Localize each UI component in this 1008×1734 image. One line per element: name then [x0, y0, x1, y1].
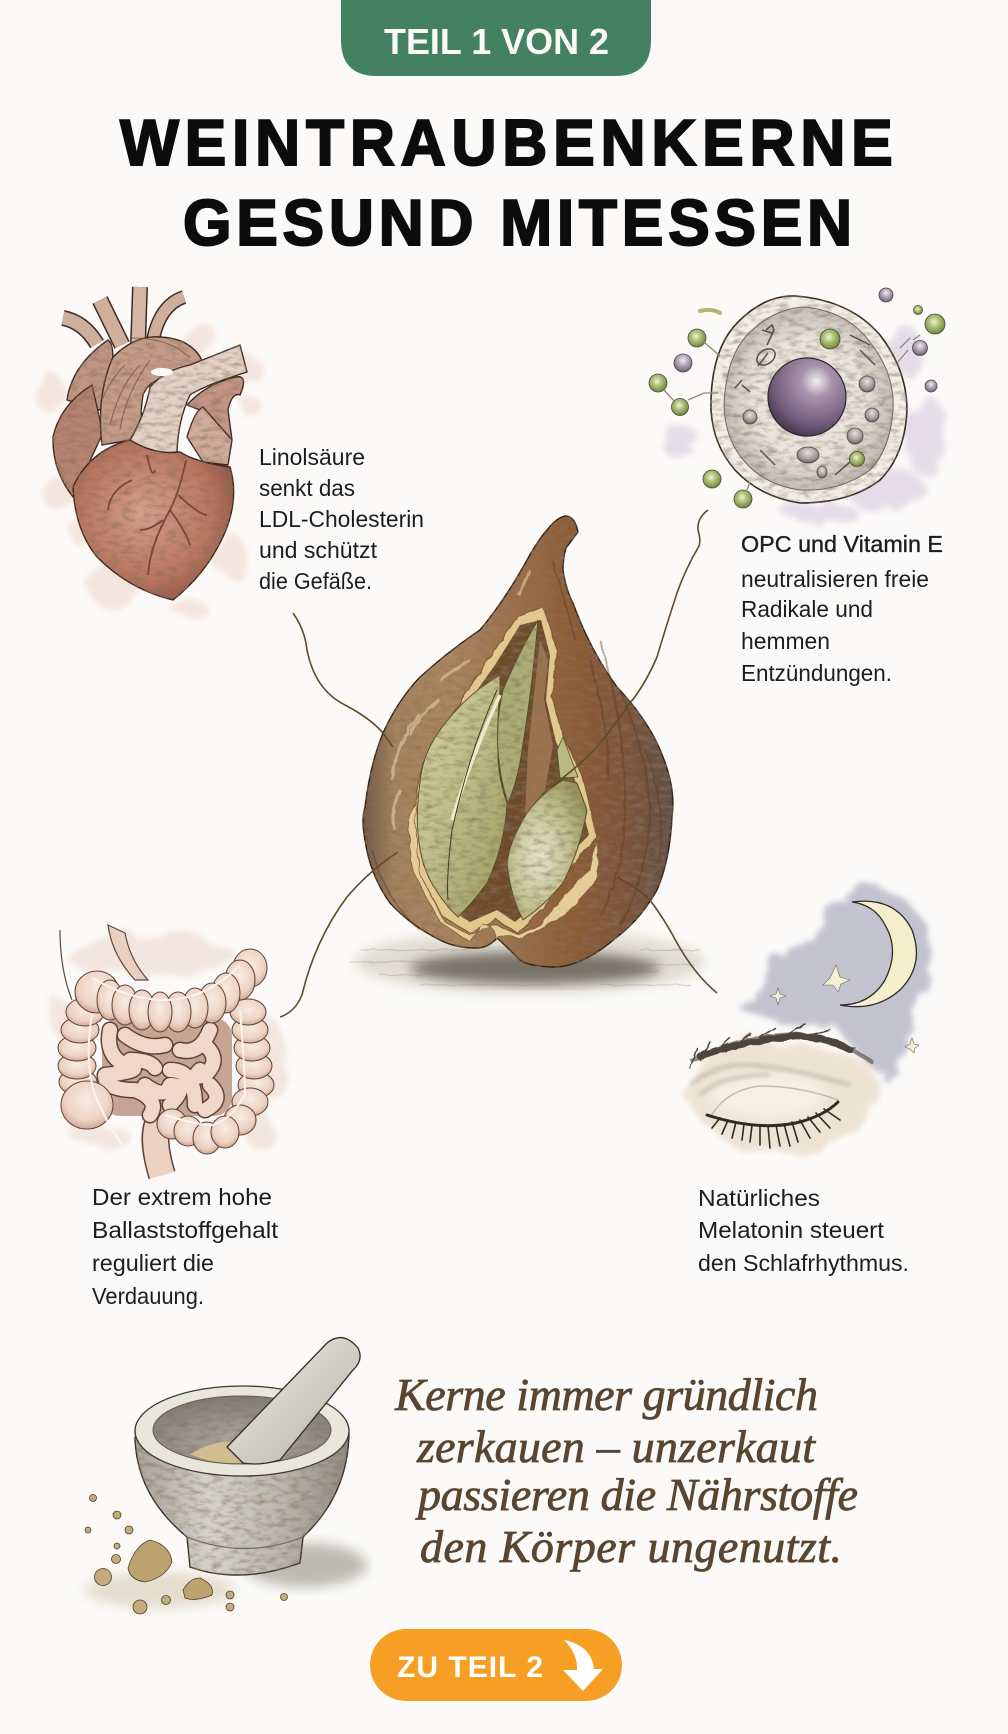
text: cell: hemmen — [741, 628, 830, 654]
text: cell — [741, 531, 943, 686]
moon — [840, 901, 916, 1007]
illustration: intestines — [49, 925, 284, 1175]
seed shadow — [350, 930, 705, 994]
text: heart — [259, 444, 424, 594]
title: GESUND MITESSEN — [183, 186, 852, 259]
handwritten note: passieren die Nährstoffe — [415, 1469, 858, 1520]
illustration: cell — [649, 288, 949, 522]
text: heart: die Gefäße. — [259, 568, 372, 594]
illustration: heart — [37, 287, 262, 620]
badge: Teil 1 von 2 — [341, 0, 651, 76]
title — [120, 106, 893, 259]
mortar bowl — [135, 1433, 349, 1575]
text: intestines: Der extrem hohe — [92, 1184, 272, 1210]
text: intestines: reguliert die — [92, 1250, 214, 1276]
heart chambers — [67, 340, 113, 410]
text: eye: Natürliches — [698, 1185, 820, 1211]
text: intestines — [92, 1184, 279, 1309]
text: intestines: Ballaststoffgehalt — [92, 1217, 279, 1243]
text: cell: OPC und Vitamin E — [741, 531, 943, 557]
crumbs — [85, 1494, 288, 1614]
text: eye: Melatonin steuert — [698, 1217, 885, 1243]
handwritten note: Kerne immer gründlich — [394, 1369, 818, 1420]
handwritten note: den Körper ungenutzt. — [420, 1521, 842, 1572]
eyebrow — [690, 1024, 872, 1068]
button: Zu Teil 2: ZU TEIL 2 — [397, 1651, 543, 1684]
eyelashes — [707, 1102, 840, 1148]
badge: Teil 1 von 2: TEIL 1 VON 2 — [384, 21, 609, 62]
text: heart: und schützt — [259, 537, 378, 563]
illustration: eye and moon — [685, 888, 931, 1157]
text: heart: LDL-Cholesterin — [259, 506, 424, 532]
text: cell: Entzündungen. — [741, 660, 892, 686]
cell particles — [649, 288, 945, 508]
text: cell: neutralisieren freie — [741, 566, 929, 592]
kernel left — [417, 675, 507, 917]
handwritten note: zerkauen – unzerkaut — [416, 1421, 816, 1472]
seed cavity — [412, 607, 597, 933]
rectum — [155, 1120, 162, 1175]
small intestine — [102, 1018, 232, 1116]
stars — [770, 965, 919, 1053]
mortar rim — [135, 1386, 349, 1476]
heart vessels — [63, 287, 184, 345]
handwritten note — [394, 1369, 858, 1572]
icon: arrow — [563, 1640, 603, 1691]
text: heart: senkt das — [259, 475, 355, 501]
pestle — [227, 1338, 360, 1464]
text: eye: den Schlafrhythmus. — [698, 1250, 909, 1276]
illustration: grape seed — [350, 516, 705, 994]
mortar shadow — [243, 1543, 367, 1587]
button: Zu Teil 2 — [370, 1629, 622, 1701]
text: intestines: Verdauung. — [92, 1283, 204, 1309]
seed shell — [363, 516, 673, 967]
nucleus — [768, 358, 846, 436]
text: heart: Linolsäure — [259, 444, 365, 470]
large intestine haustra — [58, 949, 274, 1154]
text: eye — [698, 1185, 909, 1276]
illustration: mortar and pestle — [85, 1338, 367, 1614]
cell body — [711, 296, 907, 503]
text: cell: Radikale und — [741, 596, 873, 622]
title: WEINTRAUBENKERNE — [120, 106, 893, 179]
kernel right — [507, 780, 587, 920]
leader lines — [280, 510, 717, 1017]
